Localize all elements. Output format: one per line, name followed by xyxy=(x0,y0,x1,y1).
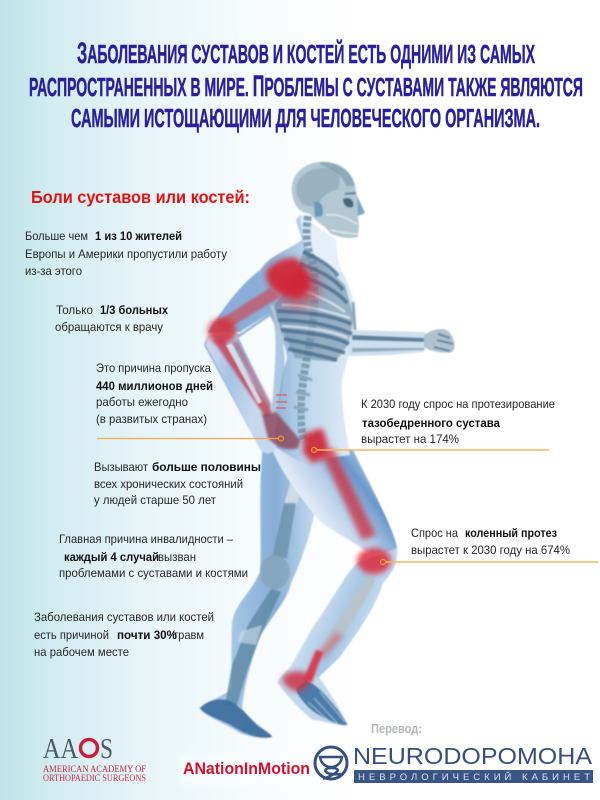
text: 1/3: Только xyxy=(56,303,93,317)
orange leader: hand xyxy=(97,436,284,441)
text: 440 million: (в развитых странах) xyxy=(96,412,207,426)
text: 1/3: 1/3 больных xyxy=(100,303,168,317)
text: disability: каждый 4 случай xyxy=(64,550,159,564)
lead leg xyxy=(270,445,397,725)
ribcage xyxy=(272,248,355,362)
forward arm xyxy=(348,329,454,356)
text: hip demand: К 2030 году спрос на протезирование xyxy=(361,397,555,411)
text: half: у людей старше 50 лет xyxy=(94,493,216,507)
joint: ankle xyxy=(303,650,323,682)
text: 440 million: 440 миллионов дней xyxy=(96,379,213,393)
text: disability: вызван xyxy=(158,550,196,564)
joint: wrist and hand xyxy=(262,412,300,449)
text: half: больше половины xyxy=(152,460,261,474)
text: injuries: на рабочем месте xyxy=(34,645,129,659)
text: 1 in 10: 1 из 10 жителей xyxy=(95,229,182,243)
text: 1 in 10: из-за этого xyxy=(25,264,82,278)
joint: knee xyxy=(357,548,391,574)
red joint highlights xyxy=(208,258,391,692)
logo: AAOS: AA xyxy=(43,734,79,765)
text: injuries: Заболевания суставов или костей xyxy=(34,610,214,624)
title xyxy=(29,37,583,133)
logo: ANationInMotion: ANationInMotion xyxy=(183,760,310,778)
logo: AAOS xyxy=(43,734,146,783)
text: knee demand: вырастет к 2030 году на 674% xyxy=(411,543,570,557)
logo: AAOS: AMERICAN ACADEMY OF xyxy=(43,764,146,774)
text: 1/3 xyxy=(55,303,168,334)
text: hip demand: тазобедренного сустава xyxy=(362,416,500,430)
logo: ANationInMotion xyxy=(180,755,312,785)
text: 1 in 10 xyxy=(25,229,227,278)
joint: femur red xyxy=(320,448,376,540)
emblem xyxy=(315,747,347,779)
text: injuries xyxy=(34,610,214,659)
text: knee demand: коленный протез xyxy=(465,526,557,540)
logo: Neurodopomoha xyxy=(315,743,593,783)
text: half: Вызывают xyxy=(94,460,148,474)
text: 440 million: Это причина пропуска xyxy=(96,361,211,375)
logo: AAOS: S xyxy=(100,734,113,765)
logo: Neurodopomoha: НЕВРОЛОГИЧЕСКИЙ КАБИНЕТ xyxy=(358,771,590,783)
text: 440 million: работы ежегодно xyxy=(96,395,188,409)
text: 1/3: обращаются к врачу xyxy=(55,320,163,334)
text: 1 in 10: Больше чем xyxy=(25,229,88,243)
text: disability xyxy=(59,532,248,580)
text: knee demand xyxy=(411,526,570,557)
joint: upper arm bone xyxy=(216,288,280,330)
text: injuries: травм xyxy=(173,628,204,642)
human body figure xyxy=(199,162,454,738)
joint: shin red xyxy=(316,632,344,660)
heading: pain: Боли суставов или костей: xyxy=(31,187,250,207)
text: disability: проблемами с суставами и костями xyxy=(59,566,248,580)
text: injuries: почти 30% xyxy=(117,628,177,642)
logo: Neurodopomoha: NEURODOPOMOHA xyxy=(353,743,593,769)
text: half: всех хронических состояний xyxy=(94,477,243,491)
orange leader: hip xyxy=(312,448,549,452)
text: disability: Главная причина инвалидности – xyxy=(59,532,233,546)
text: hip demand: вырастет на 174% xyxy=(361,432,459,446)
text: injuries: есть причиной xyxy=(34,628,109,642)
translation label: Перевод: xyxy=(371,721,422,736)
text: half xyxy=(94,460,261,507)
orange leader: knee xyxy=(380,560,598,564)
back leg xyxy=(199,445,330,738)
text: hip demand xyxy=(361,397,555,446)
text: knee demand: Спрос на xyxy=(411,526,458,540)
joint: forearm xyxy=(213,338,272,418)
joint: hip xyxy=(303,428,328,463)
skull xyxy=(292,162,365,238)
joint: elbow xyxy=(208,318,236,344)
text: 1 in 10: Европы и Америки пропустили работу xyxy=(25,247,227,261)
logo: AAOS: ORTHOPAEDIC SURGEONS xyxy=(43,773,146,783)
joint: shoulder xyxy=(276,268,320,308)
text: 440 million xyxy=(96,361,213,426)
spine xyxy=(301,216,315,442)
torso silhouette and rear arm xyxy=(204,215,355,462)
